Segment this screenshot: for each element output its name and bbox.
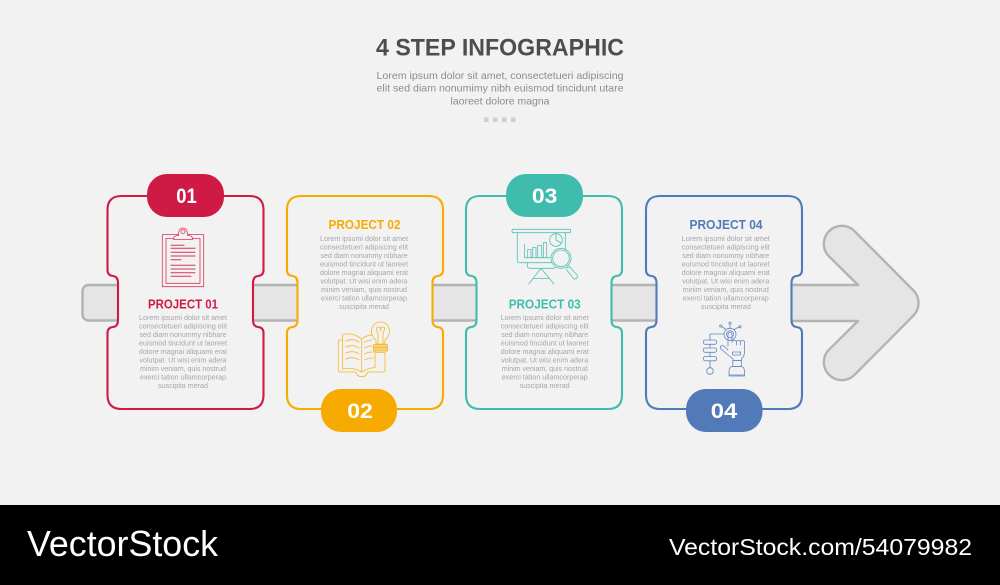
body text 4: euismod tincidunt ut laoreet <box>682 260 771 268</box>
body text 2: consectetueri adipiscing elit <box>320 242 409 252</box>
body text 1: minim veniam, quis nostrud <box>140 364 226 373</box>
footer bar <box>0 505 1000 585</box>
badge 04 <box>686 389 762 432</box>
body text 2: Lorem ipsumi dolor sit amet <box>320 234 409 243</box>
heading: project 02: PROJECT 02 <box>328 218 401 232</box>
badge 03 <box>506 174 583 217</box>
body text 2: sed diam nonummy nibhare <box>320 251 408 260</box>
body text 1: suscipita merad <box>158 381 208 390</box>
body text 3 <box>501 313 590 390</box>
footer logo: VectorStock <box>27 523 219 564</box>
title: 4 STEP INFOGRAPHIC <box>376 34 624 62</box>
body text 4: minim veniam, quis nostrud <box>683 285 769 294</box>
body text 4 <box>682 234 771 311</box>
card outline 3 <box>466 196 622 409</box>
panel: step 3 <box>466 174 622 409</box>
arrow head <box>790 226 919 380</box>
badge 02: 02 <box>347 400 373 423</box>
subtitle: elit sed diam nonumimy nibh euismod tincidunt utare <box>376 83 624 95</box>
panel: step 4 <box>646 196 802 432</box>
body text 2: exerci tation ullamcorperap <box>321 294 407 302</box>
body text 1: consectetueri adipiscing elit <box>139 322 228 330</box>
badge 01: 01 <box>176 185 197 208</box>
body text 2: dolore magnai aliquami erat <box>320 268 409 277</box>
body text 3: consectetueri adipiscing elit <box>501 322 590 330</box>
subtitle: laoreet dolore magna <box>450 95 550 107</box>
badge 03: 03 <box>532 185 557 208</box>
body text 3: euismod tincidunt ut laoreet <box>501 338 590 348</box>
card outline 4 <box>646 196 802 409</box>
body text 3: volutpat. Ut wisi enim adera <box>501 356 589 364</box>
body text 2 <box>320 234 409 311</box>
body text 3: exerci tation ullamcorperap <box>502 372 588 382</box>
body text 1: exerci tation ullamcorperap <box>140 372 226 382</box>
badge 04: 04 <box>711 400 738 423</box>
body text 2: euismod tincidunt ut laoreet <box>320 260 409 268</box>
panel: step 2 <box>287 196 443 432</box>
badge 01 <box>147 174 224 217</box>
panel: step 1 <box>108 174 264 409</box>
body text 1: euismod tincidunt ut laoreet <box>139 338 228 348</box>
footer url: VectorStock.com/54079982 <box>669 534 972 560</box>
body text 3: Lorem ipsumi dolor sit amet <box>501 313 590 322</box>
icon: clipboard <box>162 228 204 287</box>
body text 3: dolore magnai aliquami erat <box>501 347 589 356</box>
subtitle <box>376 70 624 107</box>
card outline 1 <box>108 196 264 409</box>
body text 4: exerci tation ullamcorperap <box>683 294 769 302</box>
body text 1: sed diam nonummy nibhare <box>140 330 226 339</box>
body text 4: volutpat. Ut wisi enim adera <box>682 276 770 286</box>
body text 4: dolore magnai aliquami erat <box>682 268 771 277</box>
card outline 2 <box>287 196 443 409</box>
body text 2: volutpat. Ut wisi enim adera <box>320 276 408 286</box>
body text 2: minim veniam, quis nostrud <box>321 285 407 294</box>
icon: book and bulb <box>338 322 390 377</box>
icon: presentation board with magnifier <box>512 229 577 284</box>
body text 1 <box>139 313 228 390</box>
subtitle: Lorem ipsum dolor sit amet, consectetueri adipiscing <box>376 70 624 82</box>
badge 02 <box>321 389 397 432</box>
body text 3: minim veniam, quis nostrud <box>502 364 588 373</box>
icon: robot hand with flowchart <box>703 322 744 376</box>
body text 4: sed diam nonummy nibhare <box>682 251 769 260</box>
body text 3: suscipita merad <box>520 381 570 390</box>
body text 3: sed diam nonummy nibhare <box>501 330 588 339</box>
body text 4: suscipita merad <box>701 302 751 311</box>
body text 1: Lorem ipsumi dolor sit amet <box>139 313 228 322</box>
body text 4: Lorem ipsumi dolor sit amet <box>682 234 771 243</box>
heading: project 04: PROJECT 04 <box>690 218 763 232</box>
heading: project 03: PROJECT 03 <box>509 297 581 311</box>
title dots <box>484 118 516 122</box>
body text 2: suscipita merad <box>339 302 389 311</box>
timeline bar <box>82 285 802 320</box>
body text 1: dolore magnai aliquami erat <box>139 347 228 356</box>
body text 4: consectetueri adipiscing elit <box>682 242 771 252</box>
heading: project 01: PROJECT 01 <box>148 297 218 311</box>
body text 1: volutpat. Ut wisi enim adera <box>140 356 227 364</box>
